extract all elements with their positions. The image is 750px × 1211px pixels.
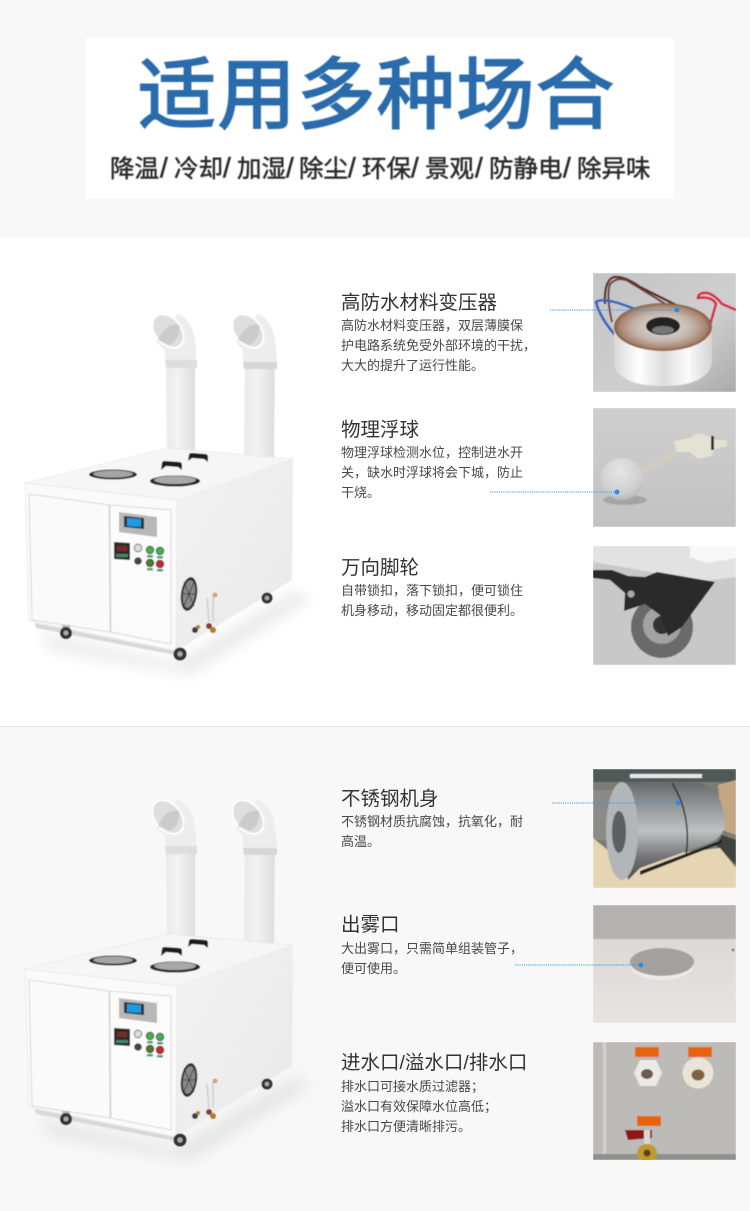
- subtitle: /: [411, 152, 419, 183]
- feature: transformer: [341, 292, 536, 373]
- feature: stainless body: 不锈钢材质抗腐蚀，抗氧化，耐: [341, 814, 523, 829]
- photo: steel coil: [593, 769, 736, 888]
- subtitle: 加湿: [237, 155, 286, 183]
- feature: mist outlet: [341, 914, 523, 976]
- photo: transformer: [593, 273, 736, 392]
- subtitle: /: [286, 152, 294, 183]
- feature: mist outlet: 出雾口: [341, 914, 400, 936]
- photo: water ports: [593, 1042, 736, 1162]
- title: 适用多种场合: [138, 51, 614, 139]
- feature: caster: 自带锁扣，落下锁扣，便可锁住: [341, 583, 523, 598]
- subtitle: /: [223, 152, 231, 183]
- product image: humidifier: [25, 307, 310, 675]
- leader line: transformer: [550, 308, 679, 312]
- subtitle: 景观: [425, 156, 474, 183]
- feature: float: 干烧。: [341, 485, 380, 500]
- subtitle: 防静电: [489, 155, 562, 183]
- feature: water ports: 排水口可接水质过滤器；: [341, 1079, 484, 1095]
- subtitle: 冷却: [174, 155, 223, 183]
- feature: float: 物理浮球: [341, 419, 419, 441]
- subtitle: 环保: [362, 155, 411, 183]
- feature: stainless body: [341, 788, 523, 849]
- panel: features 1: [24, 273, 736, 675]
- subtitle: 除尘: [299, 155, 348, 183]
- subtitle: /: [348, 152, 356, 183]
- leader line: float: [490, 490, 619, 494]
- feature: transformer: 高防水材料变压器，双层薄膜保: [341, 318, 523, 333]
- subtitle: 除异味: [577, 155, 650, 183]
- feature: water ports: [341, 1052, 527, 1134]
- feature: transformer: 高防水材料变压器: [341, 292, 497, 314]
- photo: float: [593, 408, 736, 527]
- feature: float: 关，缺水时浮球将会下城，防止: [341, 465, 523, 480]
- feature: mist outlet: 大出雾口，只需简单组装管子，: [341, 941, 523, 956]
- leader line: steel coil: [552, 801, 680, 805]
- feature: caster: 机身移动，移动固定都很便利。: [341, 603, 523, 618]
- panel: features 2: [25, 769, 736, 1162]
- feature: transformer: 护电路系统免受外部环境的干扰，: [341, 338, 536, 353]
- feature: caster: [341, 557, 523, 618]
- subtitle: /: [160, 152, 168, 183]
- photo: caster: [593, 546, 736, 665]
- divider: [0, 726, 750, 728]
- subtitle: /: [563, 152, 571, 183]
- background: lower panel: [0, 727, 750, 1211]
- photo: mist outlet: [593, 905, 736, 1023]
- feature: transformer: 大大的提升了运行性能。: [341, 358, 484, 373]
- feature: water ports: 进水口/溢水口/排水口: [341, 1052, 527, 1074]
- background: header band: [0, 0, 750, 238]
- feature: float: 物理浮球检测水位，控制进水开: [341, 445, 523, 460]
- banner: [85, 38, 674, 199]
- subtitle: 降温: [110, 155, 159, 183]
- subtitle: /: [475, 152, 483, 183]
- feature: stainless body: 高温。: [341, 834, 380, 849]
- feature: stainless body: 不锈钢机身: [341, 788, 439, 810]
- leader line: mist outlet: [515, 963, 643, 967]
- feature: water ports: 溢水口有效保障水位高低；: [341, 1099, 497, 1115]
- feature: float: [341, 419, 523, 500]
- feature: water ports: 排水口方便清晰排污。: [341, 1119, 471, 1134]
- product image: humidifier: [25, 793, 310, 1161]
- feature: caster: 万向脚轮: [341, 557, 419, 579]
- feature: mist outlet: 便可使用。: [341, 961, 406, 976]
